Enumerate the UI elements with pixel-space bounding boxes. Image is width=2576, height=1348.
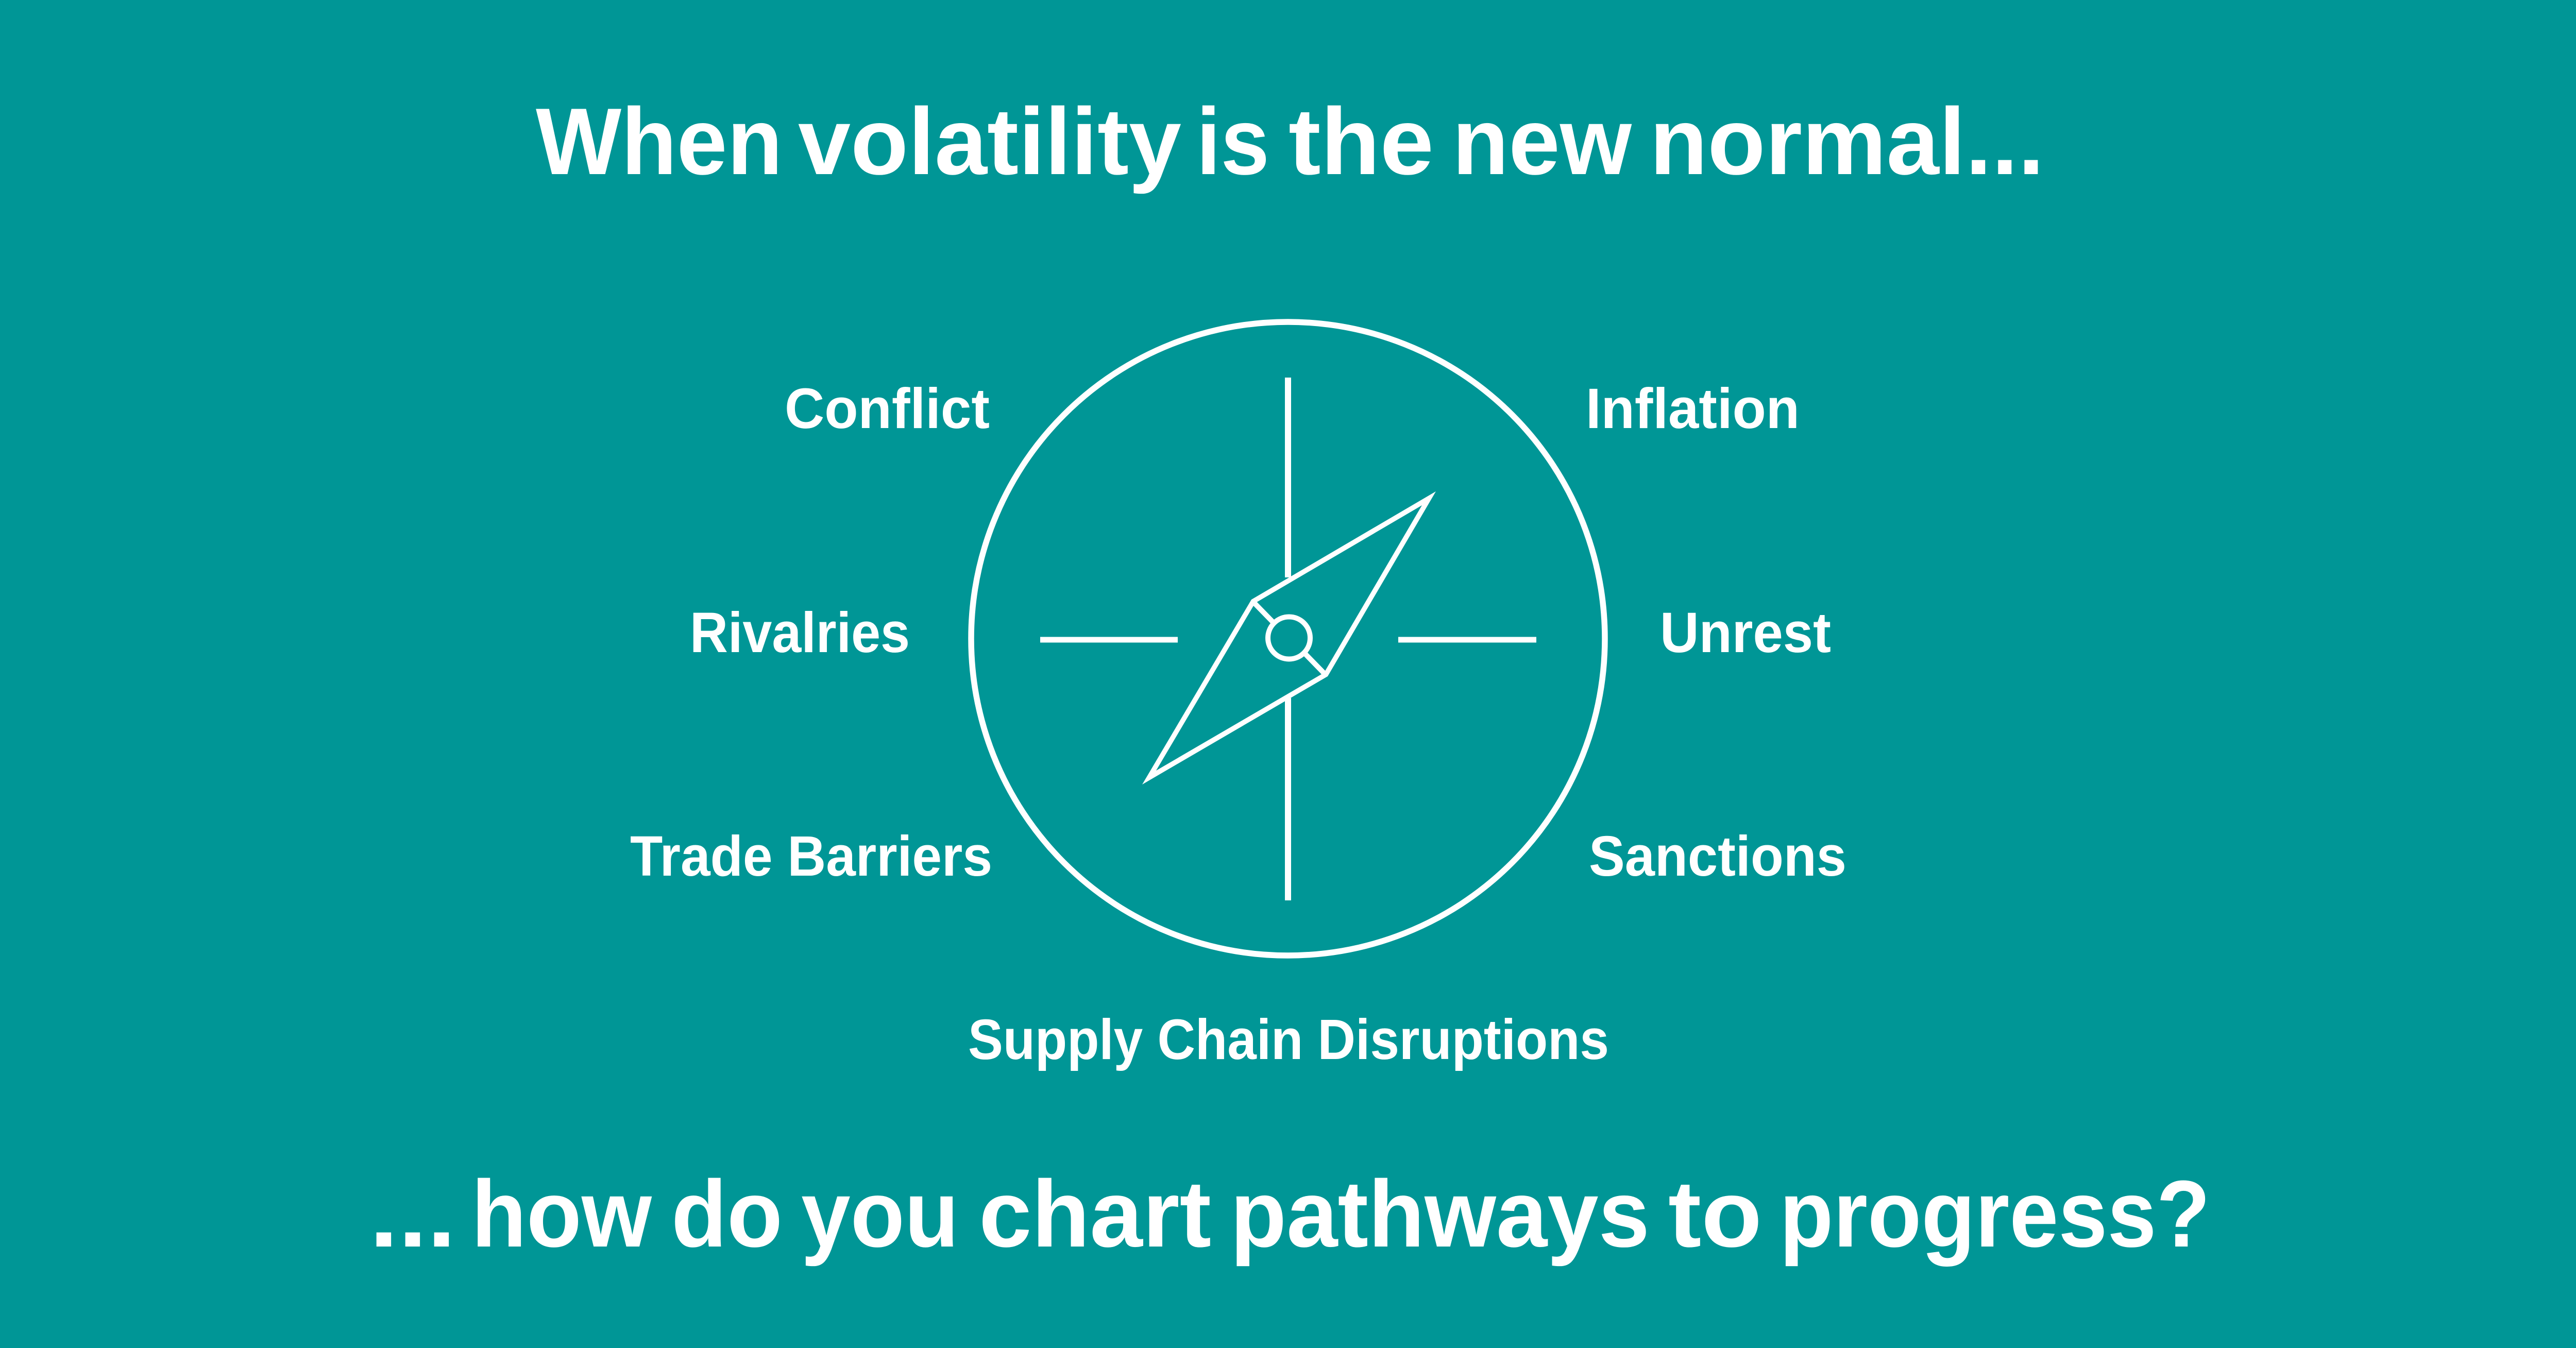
compass south tick xyxy=(1285,698,1291,900)
label: Conflict: Conflict xyxy=(785,377,990,440)
closing question: you xyxy=(801,1161,959,1267)
compass needle xyxy=(1142,491,1436,784)
icon: compass xyxy=(971,322,1605,955)
closing question: ... xyxy=(369,1161,456,1267)
label: Rivalries: Rivalries xyxy=(690,601,910,664)
label: Unrest: Unrest xyxy=(1660,601,1831,664)
title: When xyxy=(536,88,783,194)
compass needle pivot xyxy=(1254,603,1324,673)
title: is xyxy=(1196,88,1269,194)
title: volatility xyxy=(798,88,1181,194)
label: Supply Chain Disruptions: Supply Chain Disruptions xyxy=(968,1008,1609,1071)
closing question: chart xyxy=(979,1161,1211,1267)
compass east tick xyxy=(1398,637,1536,643)
title xyxy=(536,88,2044,194)
title: normal... xyxy=(1650,88,2044,194)
label: Trade Barriers: Trade Barriers xyxy=(630,825,992,888)
closing question: how xyxy=(471,1161,652,1267)
closing question: pathways xyxy=(1230,1161,1650,1267)
closing question xyxy=(369,1161,2210,1267)
compass outer ring xyxy=(971,322,1605,955)
closing question: progress? xyxy=(1780,1161,2210,1267)
label: Sanctions: Sanctions xyxy=(1589,825,1846,888)
closing question: to xyxy=(1668,1161,1762,1267)
label: Inflation: Inflation xyxy=(1586,377,1800,440)
compass north tick xyxy=(1285,378,1291,577)
closing question: do xyxy=(671,1161,783,1267)
title: new xyxy=(1452,88,1632,194)
compass west tick xyxy=(1040,637,1178,643)
title: the xyxy=(1289,88,1434,194)
